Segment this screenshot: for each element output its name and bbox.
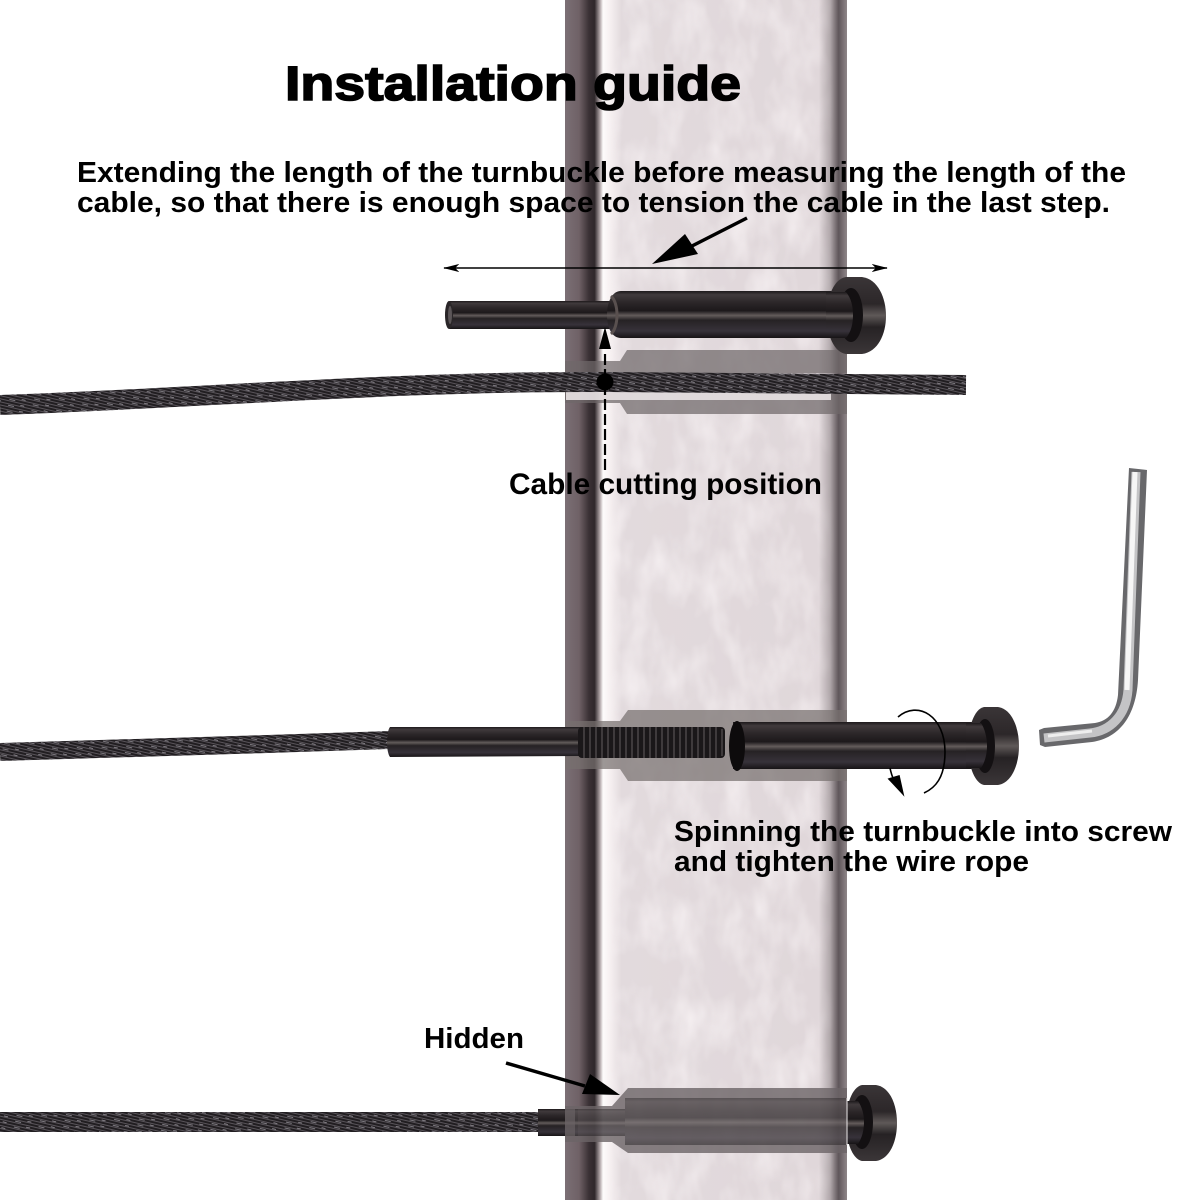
cable, step 1 — [0, 382, 966, 405]
intro text: cable, so that there is enough space to tension the cable in the last step. — [77, 187, 1110, 219]
label: cable cutting position: Cable cutting position — [509, 468, 822, 501]
icon: hex allen key — [1039, 468, 1147, 747]
post: square metal post — [565, 0, 847, 1200]
turnbuckle fitting, step 2 — [729, 707, 1019, 785]
title: Installation guide — [285, 58, 741, 111]
intro text: Extending the length of the turnbuckle before measuring the length of the — [77, 157, 1126, 189]
hidden portion inside post — [565, 1088, 847, 1153]
cable, step 2 — [0, 740, 390, 752]
turnbuckle head, step 1 — [826, 277, 886, 354]
caption: spinning the turnbuckle: and tighten the wire rope — [674, 846, 1029, 878]
step 3: hidden installed fitting — [0, 1023, 897, 1161]
cable, step 3 — [0, 1112, 545, 1132]
turnbuckle head, step 2 — [966, 707, 1019, 785]
label: hidden: Hidden — [424, 1023, 524, 1055]
pale gap under cable — [566, 392, 831, 400]
arrow to hidden section — [506, 1063, 620, 1095]
ferrule — [538, 1109, 578, 1136]
cutting position dashed arrow — [596, 327, 614, 470]
arrow pointing at dimension line — [652, 218, 747, 264]
rotation arrow — [889, 710, 945, 794]
turnbuckle fitting, step 1 — [445, 277, 886, 354]
caption: spinning the turnbuckle: Spinning the turnbuckle into screw — [674, 816, 1172, 848]
drilled hole shading, step 1 — [565, 350, 847, 414]
step 1: turnbuckle and cable measuring — [0, 218, 966, 501]
step 2: threading turnbuckle — [0, 468, 1180, 878]
dimension line — [444, 267, 887, 269]
threaded stud — [387, 727, 725, 758]
turnbuckle head, step 3 — [846, 1085, 897, 1161]
drilled hole shading, step 2 — [565, 710, 847, 781]
